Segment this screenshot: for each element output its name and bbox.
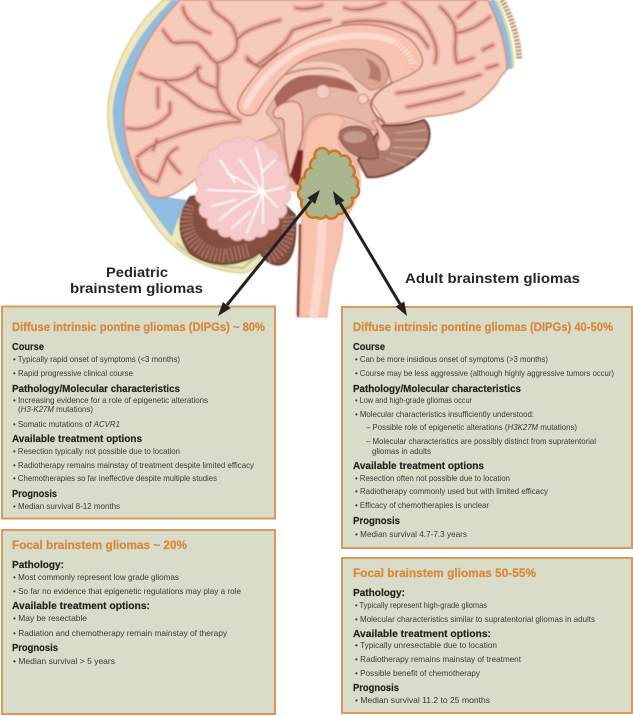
cerebrum xyxy=(124,0,507,198)
panel: pediatric DIPG: • Median survival 8-12 months xyxy=(13,501,120,511)
sulci halos xyxy=(127,2,497,182)
septum region under corpus callosum xyxy=(285,49,388,90)
blue fluid band, left xyxy=(113,0,187,237)
folia ribs xyxy=(186,205,289,257)
corpus callosum highlight xyxy=(246,36,412,106)
arrow: adult panel to tumor xyxy=(333,191,407,316)
panel: adult focal: • Typically unresectable due to location xyxy=(355,640,497,650)
folia of lower cerebellum xyxy=(180,195,296,265)
panel: pediatric DIPG: Diffuse intrinsic pontine gliomas (DIPGs) ~ 80% xyxy=(12,320,265,334)
panel: pediatric DIPG: • Somatic mutations of ACVR1 xyxy=(13,419,120,429)
panel: pediatric focal xyxy=(2,530,275,714)
panel: pediatric focal: Prognosis xyxy=(12,643,58,654)
panel: adult focal: Prognosis xyxy=(353,683,399,694)
heading: pediatric: brainstem gliomas xyxy=(70,280,203,296)
panel: adult focal: Available treatment options: xyxy=(353,629,491,640)
panel: adult DIPG: Course xyxy=(353,342,385,353)
panel: pediatric DIPG: Prognosis xyxy=(12,489,57,500)
dura layer, left xyxy=(108,0,262,273)
thalamus shadow xyxy=(274,75,364,112)
panel: pediatric DIPG: • Resection typically not possible due to location xyxy=(13,446,180,456)
corpus callosum striations xyxy=(395,43,411,70)
heading: pediatric xyxy=(70,264,203,296)
panel: pediatric DIPG: (H3-K27M mutations) xyxy=(18,404,93,414)
panel: adult DIPG: • Course may be less aggressive (although highly aggressive tumors occur) xyxy=(355,368,614,378)
panel: adult DIPG: – Possible role of epigenetic alterations (H3K27M mutations) xyxy=(366,422,577,432)
panel: adult focal: Pathology: xyxy=(353,588,405,599)
panel: adult DIPG: • Low and high-grade gliomas occur xyxy=(355,395,472,405)
panel: pediatric DIPG: Pathology/Molecular characteristics xyxy=(12,384,180,395)
panel: pediatric DIPG: • Chemotherapies so far ineffective despite multiple studies xyxy=(13,473,217,483)
stalk knob xyxy=(358,94,368,104)
lower dura tint xyxy=(176,243,258,268)
panel: adult DIPG: • Can be more insidious onset of symptoms (>3 months) xyxy=(355,354,548,364)
cerebellum white arbor xyxy=(207,148,285,233)
panel: adult DIPG xyxy=(342,307,632,548)
panel: adult DIPG: Pathology/Molecular characteristics xyxy=(353,384,521,395)
panel: pediatric DIPG: • Increasing evidence for a role of epigenetic alterations xyxy=(13,395,208,405)
corpus callosum xyxy=(238,24,422,115)
dark channel beside brainstem xyxy=(290,150,303,185)
dark right lobe xyxy=(358,120,430,177)
panel: pediatric focal: Focal brainstem gliomas ~ 20% xyxy=(12,538,187,552)
tumor xyxy=(298,148,359,219)
panel: pediatric focal: • May be resectable xyxy=(13,613,87,623)
fornix band xyxy=(285,64,364,97)
thalamic nucleus xyxy=(316,85,330,99)
panel: pediatric focal: • Median survival > 5 years xyxy=(13,656,115,666)
panel: pediatric DIPG: • Rapid progressive clinical course xyxy=(13,368,133,378)
panel: adult DIPG: Available treatment options xyxy=(353,461,484,472)
frontal gyrus edge xyxy=(371,83,392,123)
pink knob xyxy=(372,120,391,151)
cord highlight xyxy=(314,222,322,314)
panel: adult focal xyxy=(342,558,632,713)
panel: adult focal: • Median survival 11.2 to 25 months xyxy=(355,695,490,705)
panel: pediatric focal: Available treatment options: xyxy=(12,601,150,612)
panel: adult DIPG: • Efficacy of chemotherapies is unclear xyxy=(355,500,489,510)
panel: pediatric DIPG: • Typically rapid onset of symptoms (<3 months) xyxy=(13,354,180,364)
cord dark line xyxy=(298,225,300,316)
lobe ribs xyxy=(386,130,428,166)
panel: adult focal: • Molecular characteristics similar to supratentorial gliomas in adults xyxy=(355,614,595,624)
brain illustration xyxy=(108,0,519,317)
panel: adult DIPG: – Molecular characteristics are possibly distinct from supratentorial xyxy=(366,436,596,446)
septum shadow xyxy=(365,58,381,82)
panel: pediatric DIPG: Available treatment options xyxy=(12,434,142,445)
dark oval xyxy=(338,126,378,159)
arrow: pediatric panel to tumor xyxy=(218,190,320,316)
panel: pediatric DIPG xyxy=(2,306,275,518)
panel: adult DIPG: gliomas in adults xyxy=(372,446,431,456)
panel: adult DIPG: • Radiotherapy commonly used but with limited efficacy xyxy=(355,486,549,496)
oval pale center xyxy=(343,131,367,143)
panel: pediatric focal: • So far no evidence that epigenetic regulations may play a role xyxy=(13,586,241,596)
pink cerebellum xyxy=(196,138,290,240)
panel: adult DIPG: Prognosis xyxy=(353,516,400,527)
curved tube xyxy=(273,101,303,178)
brainstem and spinal cord xyxy=(300,115,360,317)
panel: adult DIPG: • Molecular characteristics insufficiently understood: xyxy=(355,409,534,419)
thalamus xyxy=(266,75,381,178)
panel: adult focal: • Possible benefit of chemotherapy xyxy=(355,668,481,678)
panel: pediatric DIPG: • Radiotherapy remains mainstay of treatment despite limited efficacy xyxy=(13,460,255,470)
panel: adult focal: Focal brainstem gliomas 50-55% xyxy=(353,566,536,580)
panel: adult DIPG: Diffuse intrinsic pontine gliomas (DIPGs) 40-50% xyxy=(353,320,613,334)
sulci xyxy=(127,2,497,182)
heading: pediatric: Pediatric xyxy=(106,264,168,280)
panel: pediatric focal: Pathology: xyxy=(12,560,64,571)
panel: adult DIPG: • Median survival 4.7-7.3 years xyxy=(355,529,467,539)
panel: pediatric focal: • Radiation and chemotherapy remain mainstay of therapy xyxy=(13,628,228,638)
heading: adult: Adult brainstem gliomas xyxy=(405,270,580,286)
panel: adult focal: • Typically represent high-grade gliomas xyxy=(355,600,487,610)
panel: adult focal: • Radiotherapy remains mainstay of treatment xyxy=(355,654,522,664)
dura layer, right xyxy=(491,0,519,69)
panel: pediatric DIPG: Course xyxy=(12,342,44,353)
panel: adult DIPG: • Resection often not possible due to location xyxy=(355,473,510,483)
central backing tissue xyxy=(215,100,385,195)
panel: pediatric focal: • Most commonly represent low grade gliomas xyxy=(13,572,179,582)
